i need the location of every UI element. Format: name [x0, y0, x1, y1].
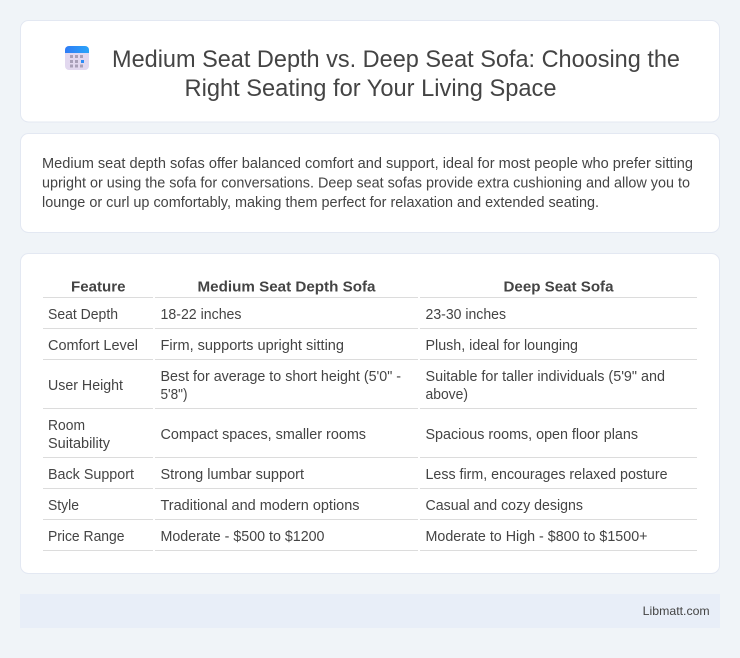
row: price range: Moderate to High - $800 to $1500+ — [426, 529, 648, 545]
row: style — [48, 498, 583, 514]
row: style: Traditional and modern options — [160, 498, 360, 514]
row: user height: Suitable for taller individuals (5'9" and — [426, 369, 665, 385]
row: seat depth: Seat Depth — [48, 307, 118, 323]
row: user height — [48, 369, 665, 403]
row: room suitability: Suitability — [48, 436, 111, 452]
row: back support: Less firm, encourages relaxed posture — [426, 467, 668, 483]
intro text: lounge or curl up comfortably, making them perfect for relaxation and extended seating. — [42, 195, 599, 211]
row: seat depth: 18-22 inches — [160, 307, 242, 323]
title: Medium Seat Depth vs. Deep Seat Sofa: Choosing the — [112, 46, 680, 73]
panel: introduction — [20, 134, 720, 232]
row: room suitability — [48, 418, 638, 452]
row: back support: Strong lumbar support — [160, 467, 304, 483]
table header — [71, 280, 614, 296]
row: comfort level: Plush, ideal for lounging — [426, 338, 578, 354]
row: user height: User Height — [48, 378, 123, 394]
panel: title card — [20, 20, 720, 122]
row: price range — [48, 529, 648, 545]
row: back support — [48, 467, 668, 483]
row: room suitability: Compact spaces, smaller rooms — [160, 427, 366, 443]
row: room suitability: Spacious rooms, open floor plans — [426, 427, 638, 443]
title — [112, 46, 680, 102]
row: user height: Best for average to short height (5'0" - — [160, 369, 401, 385]
table header: Deep Seat Sofa — [504, 280, 614, 296]
title: Right Seating for Your Living Space — [184, 75, 556, 102]
row: comfort level: Comfort Level — [48, 338, 138, 354]
row: comfort level — [48, 338, 578, 354]
row: user height: 5'8") — [160, 387, 188, 403]
footer credit: Libmatt.com — [643, 604, 710, 618]
table header: Medium Seat Depth Sofa — [198, 280, 376, 296]
row: price range: Price Range — [48, 529, 124, 545]
row: user height: above) — [426, 387, 468, 403]
panel: comparison table — [20, 254, 720, 574]
intro text: upright or using the sofa for conversations. Deep seat sofas provide extra cushioning and allow you to — [42, 176, 690, 192]
row: seat depth — [48, 307, 506, 323]
row: seat depth: 23-30 inches — [426, 307, 506, 323]
row: style: Casual and cozy designs — [426, 498, 583, 514]
row: style: Style — [48, 498, 79, 514]
row: price range: Moderate - $500 to $1200 — [160, 529, 324, 545]
icon: calendar — [65, 46, 89, 70]
footer — [20, 594, 720, 628]
row: room suitability: Room — [48, 418, 85, 434]
row: back support: Back Support — [48, 467, 134, 483]
row: comfort level: Firm, supports upright sitting — [160, 338, 344, 354]
intro text — [42, 156, 693, 211]
intro text: Medium seat depth sofas offer balanced comfort and support, ideal for most people who prefer sitting — [42, 156, 693, 172]
table header: Feature — [71, 280, 126, 296]
